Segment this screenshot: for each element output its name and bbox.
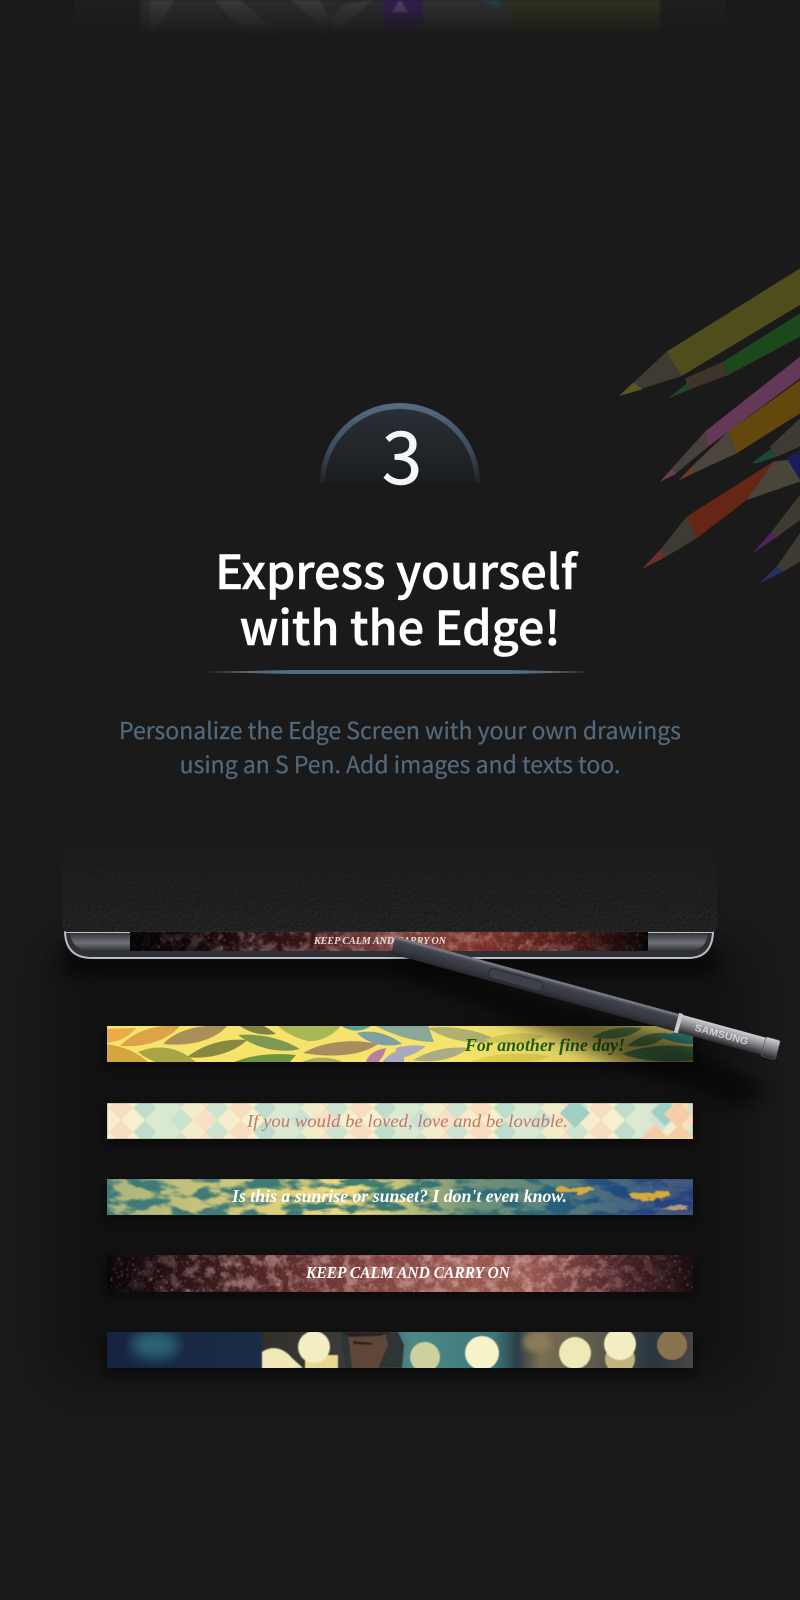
sample 2: diamond pattern	[107, 1103, 693, 1139]
left metal corner	[70, 933, 130, 951]
description text: using an S Pen. Add images and texts too.	[180, 746, 620, 780]
faded top image strip	[140, 0, 660, 30]
title: Express yourself	[215, 536, 579, 603]
description text	[119, 712, 681, 780]
decorative coloured pencils	[619, 268, 800, 583]
pen button	[488, 968, 544, 992]
sample 1: leaf pattern	[107, 1026, 693, 1062]
title: with the Edge!	[240, 592, 560, 659]
description text: Personalize the Edge Screen with your own drawings	[119, 712, 681, 746]
pen silver collar	[674, 1013, 766, 1056]
badge dome	[320, 403, 480, 483]
sample 5: portrait with bokeh	[107, 1332, 693, 1368]
phone cast shadow	[62, 945, 717, 975]
badge numeral: 3	[382, 400, 422, 506]
sample 1 text: For another fine day!	[464, 1035, 625, 1055]
pen body	[391, 936, 679, 1031]
leather cover	[62, 898, 717, 932]
edge screen samples	[103, 1025, 697, 1376]
phone with leather cover	[62, 898, 717, 970]
right metal corner	[648, 933, 708, 951]
edge screen	[130, 932, 648, 951]
phone silver frame	[65, 932, 713, 958]
sample 4: starry nebula	[107, 1255, 693, 1292]
sample 2 text: If you would be loved, love and be lovable.	[246, 1111, 568, 1131]
sample 4 text: KEEP CALM AND CARRY ON	[305, 1263, 511, 1282]
pen tip end	[761, 1037, 780, 1060]
edge screen text: KEEP CALM AND CARRY ON	[313, 936, 447, 947]
sample shadows	[103, 1030, 697, 1376]
sample 3: sunset sky	[107, 1179, 693, 1215]
S Pen	[390, 935, 780, 1060]
portrait figure	[341, 1332, 404, 1368]
ambient shadow behind lower section	[50, 945, 750, 1385]
title	[215, 536, 579, 659]
step number badge	[320, 400, 480, 506]
pen brand text: SAMSUNG	[693, 1023, 749, 1048]
S Pen shadow	[400, 955, 770, 1108]
sample 3 text: Is this a sunrise or sunset? I don't even know.	[231, 1186, 567, 1206]
title underline	[206, 670, 590, 674]
